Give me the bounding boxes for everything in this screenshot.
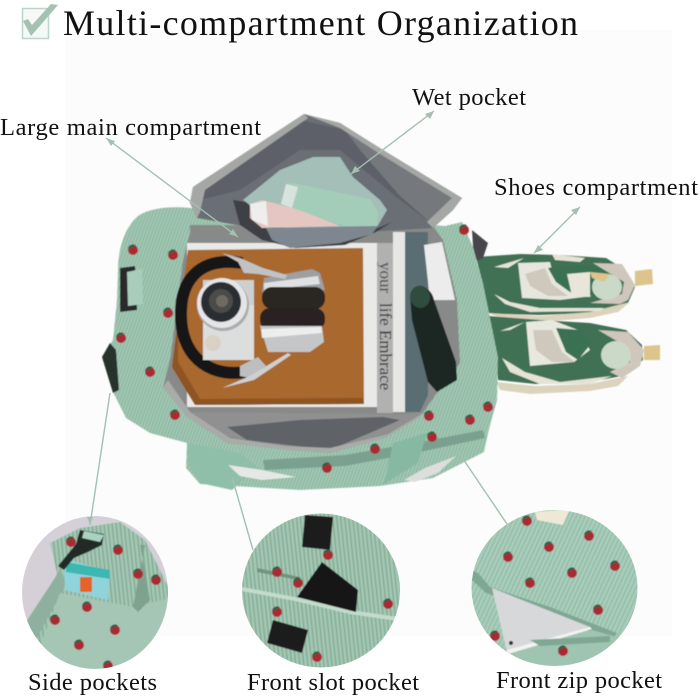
- white gap: [228, 465, 296, 480]
- right strap: [384, 433, 427, 484]
- front zip: [263, 430, 485, 470]
- label: wet pocket: Wet pocket: [412, 84, 526, 111]
- arrow: front slot pocket: [232, 477, 253, 550]
- dark shoe pocket edge: [472, 230, 488, 262]
- wet pocket lining: [243, 157, 387, 230]
- pocket opening: [233, 200, 392, 248]
- strawberries: [116, 224, 493, 473]
- camera: [197, 278, 254, 360]
- under-book lining: [168, 385, 425, 448]
- side handle: [120, 266, 137, 312]
- shoe: lower: [488, 316, 660, 394]
- arrow: shoes compartment: [534, 207, 580, 253]
- headphones: [222, 253, 325, 388]
- front strap left: [187, 443, 257, 490]
- tablet: [492, 588, 590, 652]
- headphone band: [181, 262, 246, 373]
- arrows: [90, 111, 580, 550]
- green bottle: [281, 183, 378, 226]
- lid zipper edge: [190, 114, 462, 228]
- side pocket shadow: [102, 343, 119, 393]
- shoes: [476, 254, 660, 394]
- umbrella: [410, 286, 457, 392]
- arrow: side pockets: [90, 393, 110, 525]
- title: Multi-compartment Organization: [63, 3, 578, 43]
- label: large main compartment: Large main compartment: [0, 114, 261, 141]
- circle: side pockets: [20, 514, 170, 672]
- interior: [163, 225, 460, 453]
- shirt stack: [377, 243, 393, 413]
- arrow: main compartment: [106, 138, 238, 237]
- shirt lettering: life Embrace: [376, 303, 395, 390]
- bag body: [103, 207, 498, 490]
- shirt lettering: [376, 262, 395, 390]
- book: [187, 243, 377, 407]
- circle: front zip pocket: [470, 508, 640, 668]
- shirt lettering: your: [376, 262, 395, 294]
- arrow: front zip pocket: [457, 450, 507, 524]
- arrow: wet pocket: [351, 111, 434, 174]
- circle: front slot pocket: [240, 510, 405, 670]
- lid: [190, 114, 462, 236]
- label: front zip pocket: Front zip pocket: [496, 667, 662, 694]
- icon: check mark: [22, 4, 58, 38]
- label: front slot pocket: Front slot pocket: [247, 669, 419, 696]
- label: shoes compartment: Shoes compartment: [494, 174, 698, 201]
- bag: [102, 114, 498, 490]
- label: side pockets: Side pockets: [28, 669, 157, 696]
- pink bottle: [250, 200, 340, 228]
- shadow under bag: [404, 456, 456, 482]
- bottle: [64, 561, 110, 600]
- arrowheads: [87, 111, 580, 525]
- shoe: upper: [476, 254, 653, 322]
- phone: [297, 562, 358, 612]
